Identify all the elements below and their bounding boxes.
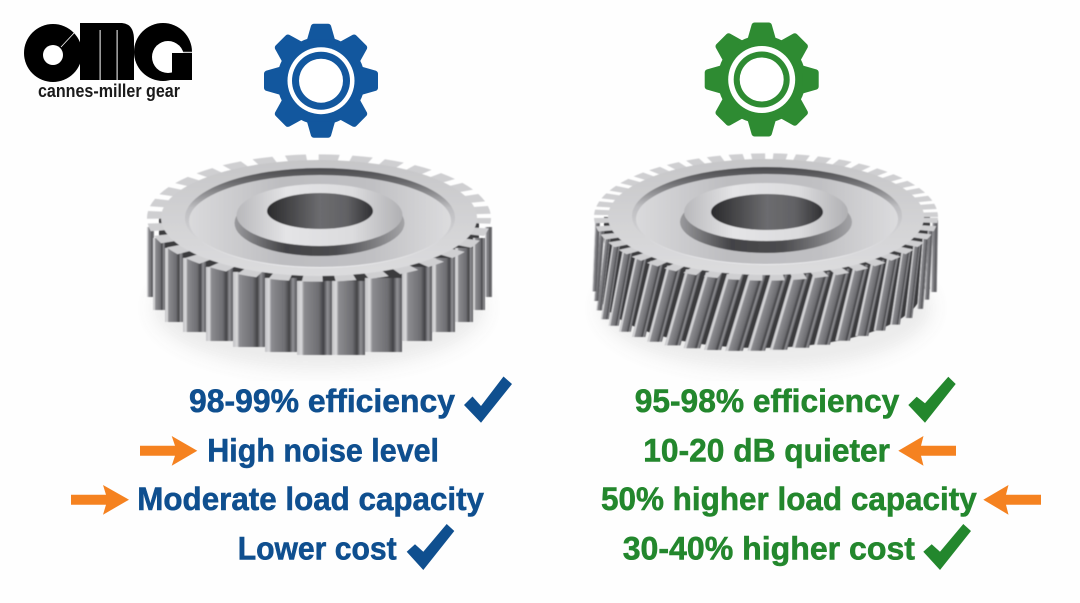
arrow: noise — [140, 436, 197, 466]
helical gear illustration — [592, 157, 938, 370]
icon: blue check mark, cost — [407, 524, 454, 570]
logo mark: letter M — [80, 23, 134, 80]
spec: efficiency: 95-98% efficiency — [635, 383, 900, 419]
spec: efficiency: 98-99% efficiency — [189, 383, 455, 419]
arrow: load capacity — [71, 485, 129, 515]
icon: green check mark, cost — [923, 524, 971, 570]
spec: load capacity: Moderate load capacity — [137, 481, 484, 517]
icon: green check mark — [908, 377, 956, 423]
logo: cannes-miller gear — [24, 23, 192, 101]
spec: load capacity: 50% higher load capacity — [601, 481, 977, 517]
spec: noise: High noise level — [207, 433, 439, 469]
icon: blue cog — [264, 24, 378, 138]
helical gear specifications — [601, 377, 1041, 570]
spec: cost: Lower cost — [238, 530, 397, 566]
spur gear specifications — [71, 376, 512, 570]
arrow: noise — [898, 436, 956, 466]
arrow: load capacity — [983, 485, 1041, 515]
icon: blue check mark — [464, 376, 512, 423]
spec: noise: 10-20 dB quieter — [643, 433, 890, 469]
logo wordmark: cannes-miller gear — [38, 80, 180, 101]
logo mark: letter O — [24, 24, 82, 82]
spur gear illustration — [147, 158, 492, 370]
spec: cost: 30-40% higher cost — [623, 530, 915, 566]
icon: green cog — [705, 22, 819, 136]
logo mark: letter A — [134, 23, 192, 81]
